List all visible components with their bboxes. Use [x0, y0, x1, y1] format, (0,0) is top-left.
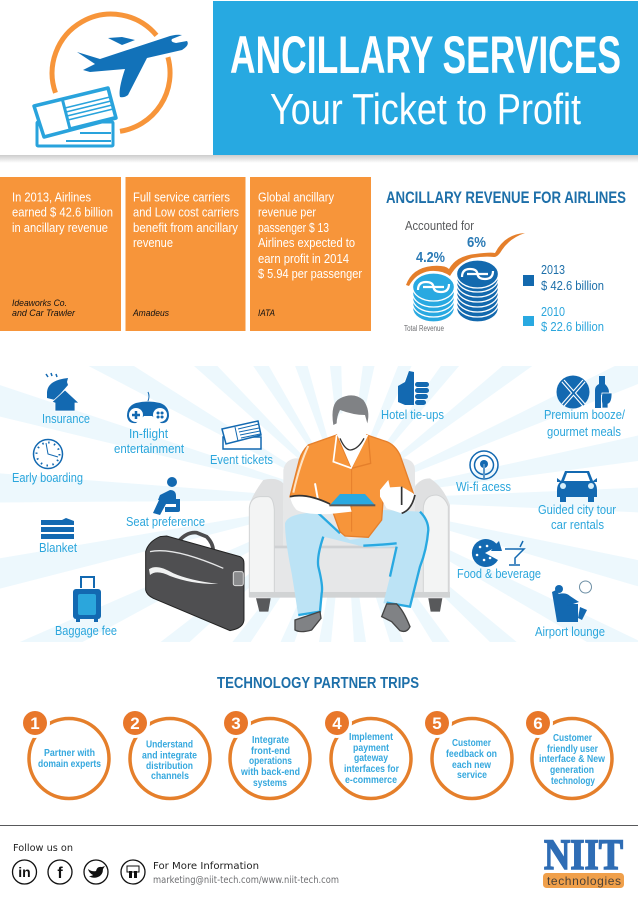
item: insurance — [42, 373, 90, 426]
footer: contact: For More Information — [153, 861, 259, 872]
step 5: Customer — [452, 737, 491, 749]
step 3: Integrate — [252, 734, 289, 746]
panel: carriers benefit: benefit from ancillary — [133, 220, 238, 235]
step 2: Understand — [146, 738, 193, 750]
legend: 2013 — [523, 262, 604, 293]
panel: airline earnings: in ancillary revenue — [12, 220, 108, 235]
step 2 — [120, 708, 210, 798]
step 2: and integrate — [142, 750, 197, 762]
step 4: gateway — [354, 752, 388, 764]
shirt — [290, 435, 413, 537]
panel: global revenue: Airlines expected to — [258, 235, 355, 250]
item: early boarding — [12, 440, 83, 485]
item: baggage fee — [55, 577, 117, 638]
logo: NIIT technologies: NIIT — [544, 832, 623, 879]
panel: carriers benefit: Full service carriers — [133, 190, 230, 204]
heading: technology partner trips: TECHNOLOGY PARTNER TRIPS — [217, 675, 419, 692]
tablet — [329, 494, 375, 506]
item: hotel tie-ups: Hotel tie-ups — [381, 408, 444, 422]
step 6: generation — [550, 764, 594, 776]
icon: linkedin: in — [18, 864, 31, 880]
step 6: friendly user — [547, 743, 598, 755]
panel: global revenue: passenger $ 13 — [258, 220, 329, 235]
item: premium booze and gourmet meals — [544, 376, 625, 439]
step 5: each new — [452, 759, 492, 771]
panel: global revenue: IATA — [258, 308, 275, 319]
step 6: Customer — [553, 732, 592, 744]
item: premium booze and gourmet meals: Premium booze/ — [544, 408, 625, 422]
footer: follow us — [12, 843, 145, 884]
panel: carriers benefit: revenue — [133, 235, 173, 250]
value: 6%: 6% — [467, 234, 486, 251]
panel: carriers benefit: Amadeus — [132, 308, 169, 319]
footer: contact — [153, 861, 339, 886]
panel: carriers benefit — [126, 177, 246, 331]
step 6 — [523, 708, 612, 798]
item: event tickets — [210, 421, 273, 467]
step 3: 3 — [231, 714, 241, 733]
step 3: operations — [249, 755, 292, 767]
icon: briefcase — [146, 533, 244, 631]
arms and hands — [290, 480, 415, 514]
sofa — [249, 458, 450, 612]
legend: 2013: $ 42.6 billion — [541, 278, 604, 293]
step 1 — [20, 708, 109, 798]
trousers — [285, 510, 428, 617]
item: in-flight entertainment: In-flight — [129, 427, 168, 441]
legend: 2010: $ 22.6 billion — [541, 319, 604, 334]
item: guided city tour car rentals: car rentals — [551, 518, 604, 532]
panel: global revenue: earn profit in 2014 — [258, 251, 349, 266]
panel: ancillary revenue chart — [386, 189, 626, 334]
icon: plane and tickets — [34, 14, 188, 146]
panel: global revenue: Global ancillary — [258, 190, 334, 204]
step 5: 5 — [432, 714, 442, 733]
item: wi-fi access: Wi-fi acess — [456, 480, 511, 494]
step 4 — [322, 708, 411, 798]
item: hotel tie-ups — [381, 371, 444, 422]
step 2: 2 — [130, 714, 140, 733]
step 5: service — [457, 769, 487, 781]
legend: 2010 — [523, 304, 604, 334]
illustration: man on sofa — [249, 395, 450, 632]
step 1: domain experts — [38, 758, 101, 770]
icon: twitter — [84, 860, 108, 884]
panel: global revenue: $ 5.94 per passenger — [258, 266, 363, 281]
item: food and beverage: Food & beverage — [457, 567, 541, 581]
item: food and beverage — [457, 539, 541, 581]
step 2: distribution — [146, 760, 193, 772]
item: blanket: Blanket — [39, 541, 77, 555]
step 4: e-commerce — [345, 774, 397, 786]
step 3: systems — [253, 777, 287, 789]
icon: slideshare — [121, 860, 145, 884]
head — [332, 395, 368, 468]
title panel — [213, 1, 638, 155]
legend: 2013: 2013 — [541, 262, 565, 277]
step 5 — [422, 708, 512, 798]
item: guided city tour car rentals: Guided city tour — [538, 503, 616, 517]
footer: contact: marketing@niit-tech.com/www.niit-tech.com — [153, 875, 339, 886]
item: early boarding: Early boarding — [12, 471, 83, 485]
step 3 — [221, 708, 310, 798]
item: in-flight entertainment: entertainment — [114, 442, 184, 456]
item: guided city tour car rentals — [538, 471, 616, 532]
panel: global revenue — [250, 177, 371, 331]
item: premium booze and gourmet meals: gourmet meals — [547, 425, 621, 439]
footer: follow us: Follow us on — [13, 843, 73, 854]
panel: airline earnings — [0, 177, 121, 331]
item: event tickets: Event tickets — [210, 453, 273, 467]
step 6: 6 — [533, 714, 543, 733]
header banner — [0, 1, 638, 163]
icon: facebook: f — [57, 865, 63, 882]
step 4: 4 — [332, 714, 342, 733]
item: insurance: Insurance — [42, 412, 90, 426]
legend: 2010: 2010 — [541, 304, 565, 319]
panel: airline earnings: In 2013, Airlines — [12, 190, 91, 204]
value: 4.2%: 4.2% — [416, 249, 445, 266]
item: airport lounge — [535, 581, 605, 639]
step 6: interface & New — [539, 753, 606, 765]
panel: carriers benefit: and Low cost carriers — [133, 204, 239, 220]
step 6: technology — [551, 775, 595, 787]
step 5: feedback on — [446, 748, 497, 760]
step 4: Implement — [349, 731, 393, 743]
item: wi-fi access — [456, 451, 511, 494]
step 4: interfaces for — [344, 763, 399, 775]
accounted for label: Accounted for — [405, 218, 475, 233]
panel: airline earnings: and Car Trawler — [12, 308, 76, 319]
total revenue label: Total Revenue — [404, 324, 444, 333]
item: blanket — [39, 518, 77, 555]
step 1: Partner with — [44, 747, 95, 759]
item: seat preference — [126, 477, 205, 529]
step 2: channels — [151, 770, 189, 782]
step 3: front-end — [251, 745, 290, 757]
panel: airline earnings: earned $ 42.6 billion — [12, 204, 113, 220]
item: in-flight entertainment — [114, 392, 184, 456]
logo: NIIT technologies: technologies — [547, 874, 621, 888]
panel: global revenue: revenue per — [258, 204, 317, 220]
item: seat preference: Seat preference — [126, 515, 205, 529]
shoes — [295, 604, 410, 632]
chart: coin stacks — [406, 233, 525, 322]
panel: airline earnings: Ideaworks Co. — [12, 298, 67, 309]
step 4: payment — [353, 742, 389, 754]
item: airport lounge: Airport lounge — [535, 625, 605, 639]
step 1: 1 — [30, 714, 40, 733]
item: baggage fee: Baggage fee — [55, 624, 117, 638]
step 3: with back-end — [240, 766, 300, 778]
